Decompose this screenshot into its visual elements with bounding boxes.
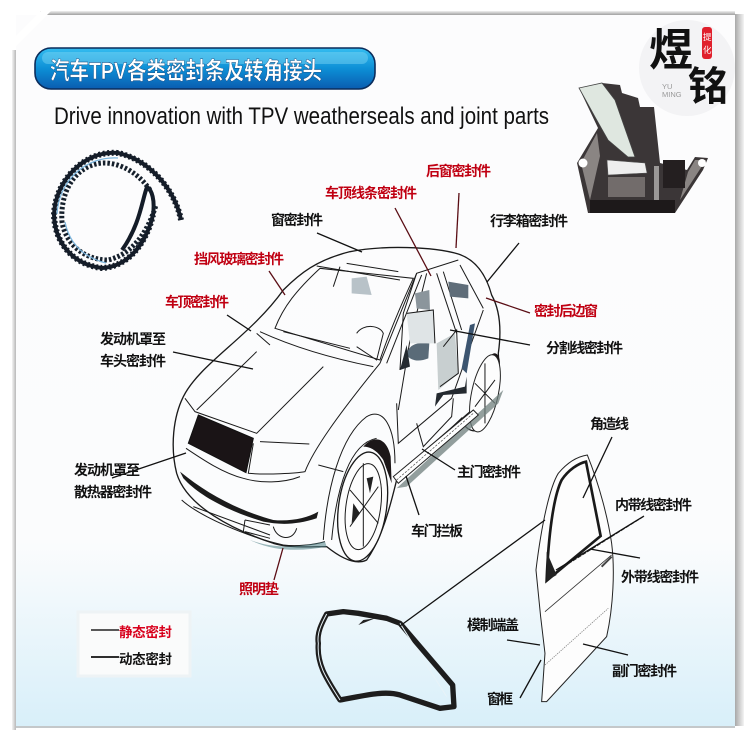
label: inner belt seal: 内带线密封件 <box>615 497 692 513</box>
door window <box>547 462 601 581</box>
label: rear window seal: 后窗密封件 <box>426 163 491 179</box>
label: hood to radiator seal <box>74 462 152 500</box>
bumper <box>180 472 318 524</box>
English subtitle: Drive innovation with TPV weatherseals and joint parts <box>54 103 549 130</box>
label: outer belt seal: 外带线密封件 <box>621 569 699 585</box>
interior seats <box>352 273 475 407</box>
brand logo <box>639 20 735 116</box>
rear wheel <box>464 352 506 435</box>
brand logo: 铭 <box>688 65 728 109</box>
logo red seal: 提 <box>703 32 712 42</box>
brand logo: 煜 <box>649 26 693 75</box>
logo red seal: 化 <box>703 45 712 55</box>
label: roof line seal: 车顶线条密封件 <box>325 185 417 201</box>
label: rear edge window seal: 密封后边窗 <box>534 303 598 319</box>
bonnet <box>185 333 323 433</box>
car body outline <box>173 247 500 562</box>
door outline <box>536 455 613 702</box>
windshield <box>275 268 413 360</box>
banner title text: 汽车TPV各类密封条及转角接头 <box>50 57 322 85</box>
grille <box>188 415 253 473</box>
label: molded end cap: 模制端盖 <box>467 617 519 633</box>
front wheel <box>318 414 395 564</box>
door frame seal <box>318 612 454 708</box>
logo small letters: YU <box>662 82 672 91</box>
label: main door seal: 主门密封件 <box>457 464 521 480</box>
label: auxiliary door seal: 副门密封件 <box>612 663 677 679</box>
title banner <box>35 48 375 89</box>
logo small letters: MING <box>662 90 682 99</box>
legend: static seal: 静态密封 <box>119 624 172 640</box>
sill shadow <box>397 390 503 488</box>
headlight and wing <box>186 363 380 482</box>
label: window frame: 窗框 <box>487 691 513 707</box>
logo red seal <box>702 27 712 59</box>
label: lighting gasket: 照明垫 <box>239 581 279 597</box>
label: window seal: 窗密封件 <box>271 212 323 228</box>
doors and pillars <box>380 260 483 477</box>
legend <box>78 612 190 676</box>
label: roof seal: 车顶密封件 <box>165 294 229 310</box>
seal strip coil <box>54 153 181 268</box>
ground shadow <box>250 540 327 550</box>
label: windshield seal: 挡风玻璃密封件 <box>194 251 284 267</box>
car illustration <box>173 247 506 564</box>
label: corner moulding: 角造线 <box>590 416 629 432</box>
label: trunk seal: 行李箱密封件 <box>490 213 568 229</box>
door illustration <box>536 455 643 702</box>
label: hood to radiator seal: 发动机罩至 <box>74 462 140 478</box>
legend: dynamic seal: 动态密封 <box>119 651 172 667</box>
labels and leader lines <box>74 163 699 707</box>
corner joint part photo <box>577 83 708 213</box>
label: hood to front seal: 车头密封件 <box>100 353 166 369</box>
label: hood to radiator seal: 散热器密封件 <box>74 484 152 500</box>
label: hood to front seal: 发动机罩至 <box>100 331 166 347</box>
label: hood to front seal <box>100 331 166 369</box>
red leaders: static seals <box>269 193 530 580</box>
label: parting line seal: 分割线密封件 <box>546 340 623 356</box>
black leaders: dynamic seals <box>112 233 644 698</box>
label: door sill: 车门拦板 <box>411 523 463 539</box>
